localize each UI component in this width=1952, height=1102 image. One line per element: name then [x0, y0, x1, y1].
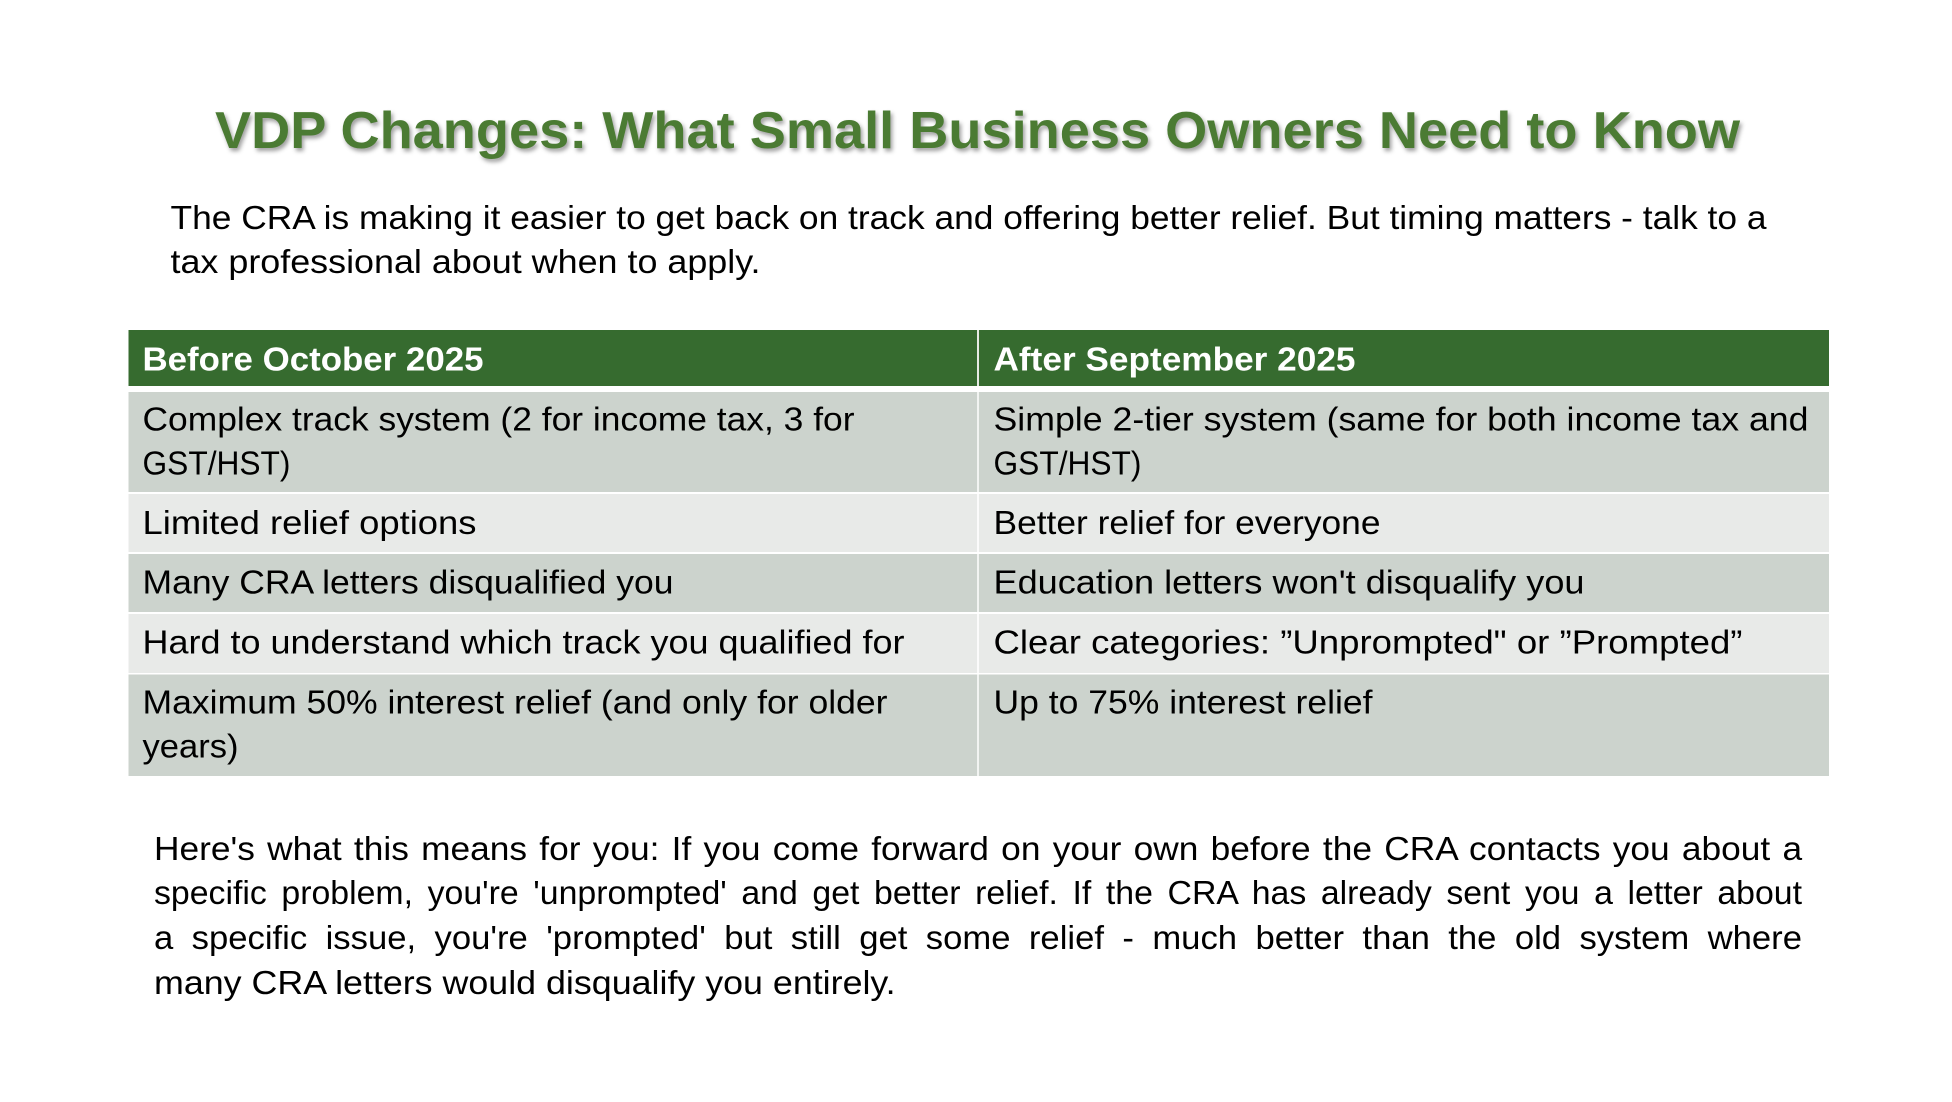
row: interest relief: Maximum 50% interest relief (and only for older [142, 684, 888, 720]
row: interest relief: Up to 75% interest relief [994, 684, 1373, 720]
row: relief options [128, 494, 1829, 552]
title: VDP Changes: What Small Business Owners Need to Know [215, 102, 1741, 160]
row: categories: Hard to understand which track you qualified for [142, 624, 905, 660]
row: categories: Clear categories: ”Unprompted" or ”Prompted” [994, 624, 1742, 660]
intro text: tax professional about when to apply. [170, 243, 760, 280]
intro text: The CRA is making it easier to get back on track and offering better relief. But timing matters - talk to a [170, 199, 1767, 236]
table header row: Before October 2025 [142, 340, 484, 378]
row: relief options: Limited relief options [142, 504, 476, 541]
row: interest relief: years) [142, 728, 238, 764]
row: track system: GST/HST) [994, 444, 1142, 482]
explanation paragraph [154, 830, 1802, 1001]
row: track system [128, 392, 1829, 492]
row: track system: Simple 2-tier system (same for both income tax and [994, 400, 1808, 438]
table header row [128, 330, 1829, 386]
intro text [170, 199, 1767, 280]
row: relief options: Better relief for everyone [994, 504, 1380, 541]
row: CRA letters: Many CRA letters disqualified you [142, 564, 674, 600]
table header row: After September 2025 [994, 340, 1356, 378]
row: CRA letters [128, 554, 1829, 612]
explanation paragraph: Here's what this means for you: If you come forward on your own before the CRA contacts you about a [154, 830, 1802, 867]
row: track system: GST/HST) [142, 444, 290, 482]
comparison table [128, 330, 1829, 776]
row: interest relief [128, 674, 1829, 776]
explanation paragraph: a specific issue, you're 'prompted' but still get some relief - much better than the old system where [154, 919, 1802, 956]
row: CRA letters: Education letters won't disqualify you [994, 564, 1584, 600]
explanation paragraph: specific problem, you're 'unprompted' and get better relief. If the CRA has already sent you a letter about [154, 874, 1802, 911]
row: track system: Complex track system (2 for income tax, 3 for [142, 400, 855, 438]
explanation paragraph: many CRA letters would disqualify you entirely. [154, 964, 896, 1001]
row: categories [128, 614, 1829, 673]
